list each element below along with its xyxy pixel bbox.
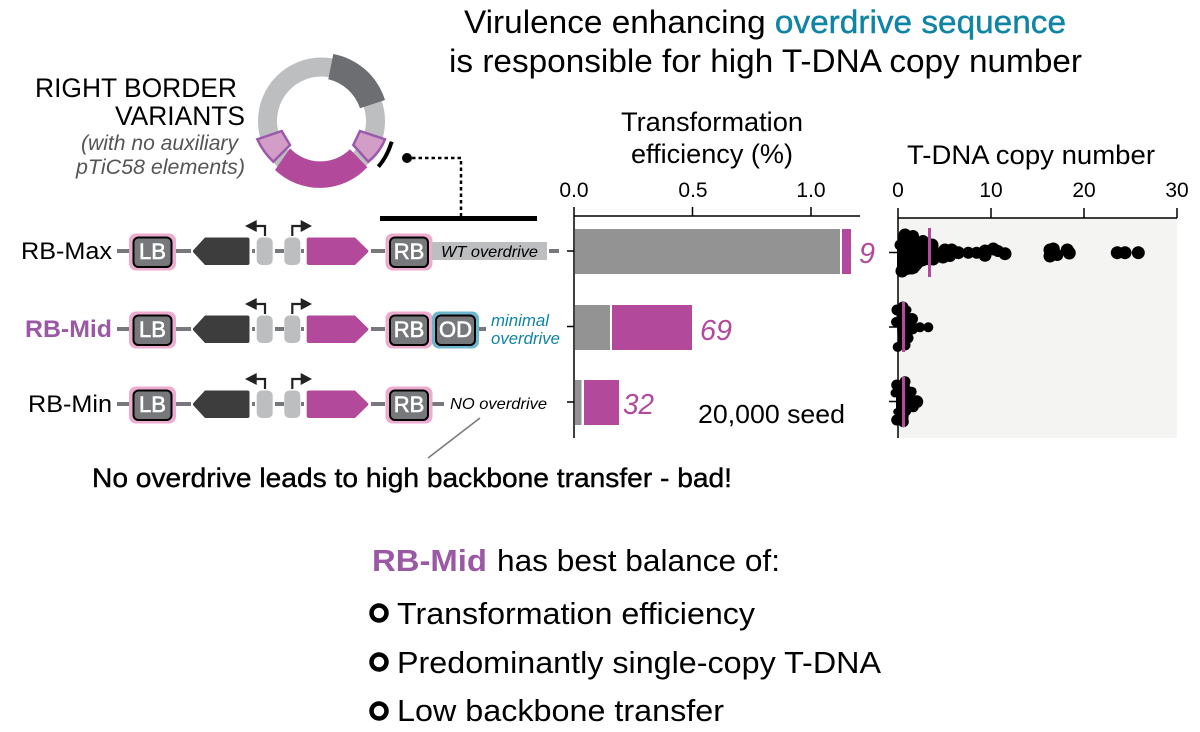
axis ticks: [559, 179, 826, 202]
value labels: 32: [623, 389, 654, 421]
heading: transformation efficiency: Transformation: [621, 107, 803, 137]
ring: right border marker: [378, 142, 392, 167]
callout: backbone transfer: No overdrive leads to high backbone transfer - bad!: [92, 463, 732, 493]
title: Virulence enhancing overdrive sequence: [464, 4, 1066, 40]
label: seed count: 20,000 seed: [698, 399, 845, 429]
RB-Mid highlight: RB-Mid: [372, 543, 487, 578]
axis ticks: 30: [1165, 179, 1189, 202]
LB element: LB: [139, 239, 166, 264]
value labels: 69: [700, 315, 732, 347]
magenta gene: [307, 238, 368, 265]
bullet 1: Transformation efficiency: [397, 596, 756, 631]
RB element: RB: [394, 317, 424, 342]
heading: transformation efficiency: [621, 107, 803, 169]
title: is responsible for high T-DNA copy number: [449, 43, 1082, 79]
bars: RB-Min: [575, 380, 619, 425]
RB element: [386, 386, 432, 424]
row: RB-Mid construct: [25, 298, 560, 348]
heading: right border variants: VARIANTS: [115, 101, 245, 131]
minimal overdrive label: [491, 312, 560, 348]
dots: RB-Max: [894, 228, 1145, 278]
dots: RB-Mid: [891, 302, 933, 352]
bullet 2: Predominantly single-copy T-DNA: [397, 645, 881, 680]
value labels: 9: [859, 238, 875, 270]
heading: copy number: T-DNA copy number: [907, 140, 1155, 170]
heading: transformation efficiency: efficiency (%): [631, 139, 793, 169]
RB element: [386, 234, 432, 270]
heading: right border variants: pTiC58 elements): [75, 156, 245, 179]
WT overdrive bar: WT overdrive: [441, 244, 538, 261]
axis ticks: 20: [1072, 179, 1096, 202]
OD element: OD: [439, 317, 472, 342]
RB element: [386, 312, 432, 348]
dot plot: copy number: [889, 179, 1189, 438]
axis ticks: 0.0: [559, 179, 589, 202]
conclusion heading: [372, 543, 780, 578]
dark gene: [193, 238, 250, 265]
mean line: RB-Max: [928, 228, 931, 277]
bars: RB-Mid: [575, 305, 692, 350]
bullet 3: Low backbone transfer: [397, 693, 724, 728]
dotted leader: [380, 153, 537, 221]
ring: magenta segment: [275, 148, 367, 188]
mean line: RB-Mid: [902, 302, 905, 352]
magenta gene: [307, 390, 368, 418]
LB element: [129, 234, 176, 270]
heading: right border variants: RIGHT BORDER: [35, 73, 237, 103]
promoter left: [245, 220, 273, 265]
bars: RB-Max: [575, 229, 851, 274]
heading text: has best balance of:: [497, 543, 780, 578]
OD element: [432, 312, 479, 348]
axis ticks: 10: [979, 179, 1003, 202]
magenta gene: [307, 316, 368, 343]
mean line: RB-Min: [902, 377, 905, 427]
axis ticks: [892, 179, 1189, 202]
label: RB-Min: RB-Min: [28, 391, 112, 418]
conclusion list: [372, 596, 881, 728]
promoter right: [284, 220, 312, 265]
label: RB-Mid: RB-Mid: [25, 316, 112, 343]
promoter right: [284, 373, 312, 418]
axis ticks: 0: [892, 179, 904, 202]
minimal overdrive label: overdrive: [491, 330, 560, 348]
row: RB-Min construct: [28, 373, 547, 424]
row: RB-Max construct: [21, 220, 559, 270]
RB element: RB: [394, 392, 424, 417]
callout line: [428, 418, 480, 458]
plasmid ring: [257, 54, 392, 188]
promoter right: [284, 298, 312, 343]
ring: left border segment: [257, 131, 290, 162]
heading: right border variants: [35, 73, 245, 179]
LB element: LB: [139, 392, 166, 417]
promoter left: [245, 298, 273, 343]
heading: right border variants: (with no auxiliary: [81, 132, 239, 155]
ring: dark segment: [328, 54, 385, 108]
title: [449, 4, 1082, 79]
axis ticks: 1.0: [796, 179, 826, 202]
LB element: [129, 312, 176, 348]
value labels: [623, 238, 875, 421]
label: RB-Max: RB-Max: [21, 238, 112, 265]
dots: RB-Min: [890, 376, 923, 427]
NO overdrive label: NO overdrive: [450, 396, 547, 413]
LB element: [129, 386, 176, 424]
dark gene: [193, 316, 250, 343]
LB element: LB: [139, 317, 166, 342]
ring: right border segment: [353, 131, 385, 162]
bar chart: transformation efficiency: [559, 179, 875, 438]
axis ticks: 0.5: [678, 179, 708, 202]
minimal overdrive label: minimal: [491, 312, 550, 330]
dark gene: [193, 390, 250, 418]
RB element: RB: [394, 239, 424, 264]
promoter left: [245, 373, 273, 418]
